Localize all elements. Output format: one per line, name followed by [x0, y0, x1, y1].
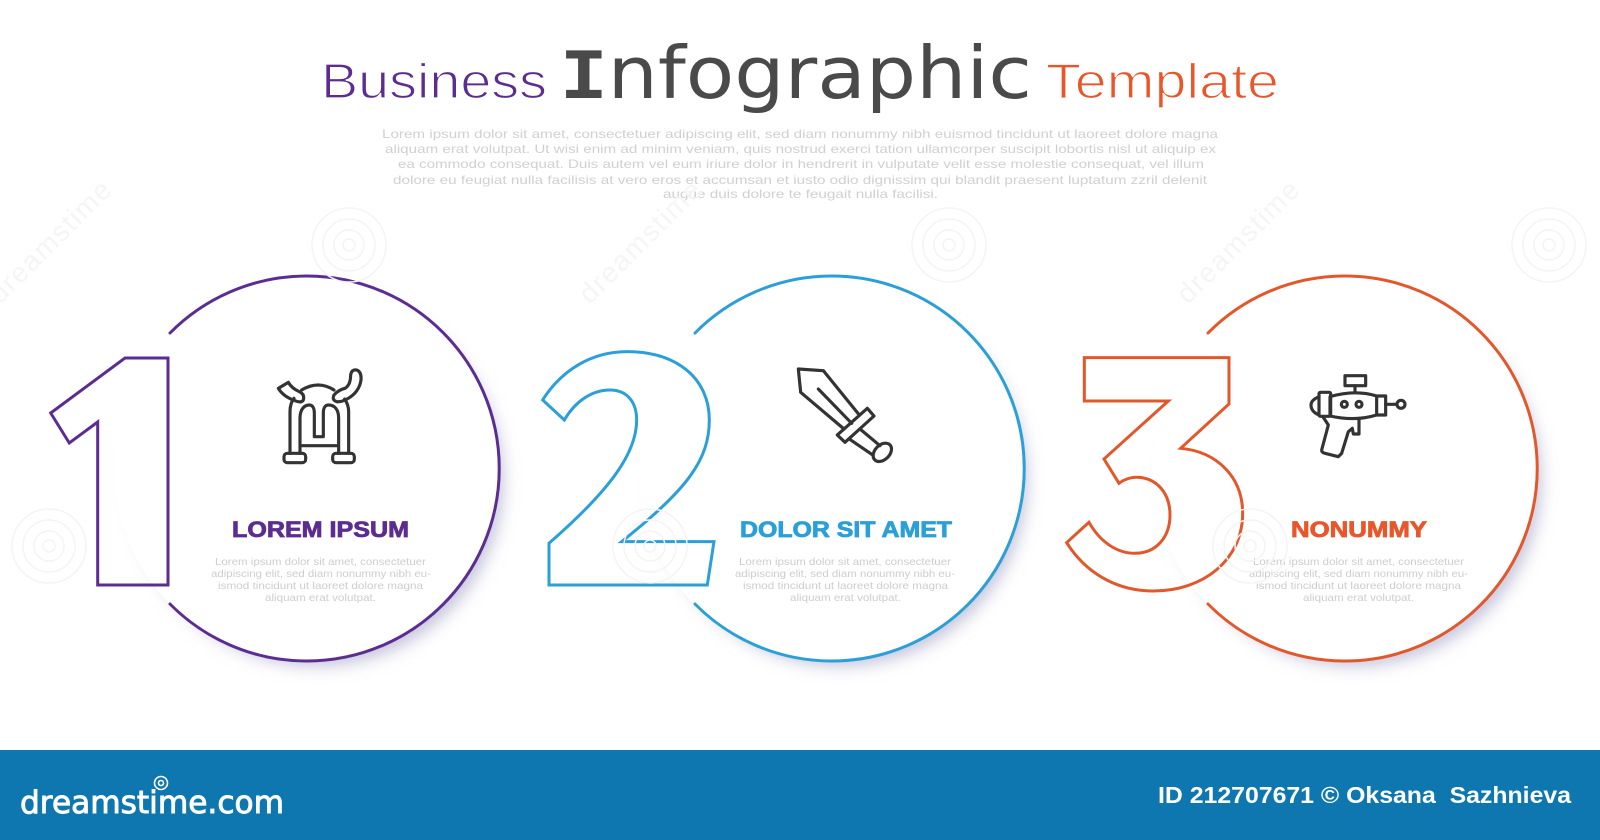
title word: Template: Template: [1046, 55, 1279, 109]
text 1: Lorem ipsum dolor sit amet, consectetuer: [215, 556, 427, 568]
text 2: adipiscing elit, sed diam nonummy nibh eu-: [735, 568, 956, 580]
panel: step 2: [543, 276, 1027, 666]
footer band: [0, 750, 1600, 840]
intro paragraph: aliquam erat volutpat. Ut wisi enim ad minim veniam, quis nostrud exerci tation ullamcorper suscipit lobortis nisl ut aliquip ex: [385, 142, 1216, 156]
number 3: [1067, 358, 1243, 591]
text 2: [735, 556, 956, 604]
icon: logo spiral: [154, 776, 168, 790]
text 2: aliquam erat volutpat.: [790, 592, 901, 604]
circle fill 2: [638, 276, 1023, 661]
icon: ray gun: [1311, 376, 1405, 457]
icon: sword: [798, 369, 895, 465]
text 3: adipiscing elit, sed diam nonummy nibh eu-: [1249, 568, 1469, 580]
intro paragraph: Lorem ipsum dolor sit amet, consectetuer adipiscing elit, sed diam nonummy nibh euismod tincidunt ut laoreet dolore magna: [382, 127, 1218, 141]
circle outline 1: [170, 276, 499, 661]
text 1: ismod tincidunt ut laoreet dolore magna: [218, 580, 423, 592]
watermark marks: dreamstime: [1170, 174, 1305, 309]
title word: Infographic: Infographic: [560, 31, 1032, 120]
circle fill 3: [1152, 276, 1537, 661]
text 3: Lorem ipsum dolor sit amet, consectetuer: [1253, 556, 1465, 568]
circle outline 2: [695, 276, 1024, 661]
panel: step 3: [1067, 276, 1541, 666]
text 3: [1249, 556, 1469, 604]
circle outline 3: [1208, 276, 1537, 661]
text 1: [211, 556, 432, 604]
watermark marks: dreamstime: [572, 174, 707, 309]
number 2: [543, 352, 714, 585]
text 2: ismod tincidunt ut laoreet dolore magna: [743, 580, 948, 592]
heading 3: NONUMMY: [1291, 517, 1427, 542]
watermark marks: [0, 174, 1586, 583]
intro paragraph: augue duis dolore te feugait nulla facilisi.: [663, 187, 938, 201]
circle shadow 3: [1169, 294, 1541, 666]
heading 1: LOREM IPSUM: [232, 517, 409, 542]
number 1: [51, 358, 168, 585]
text 1: aliquam erat volutpat.: [265, 592, 376, 604]
text 3: aliquam erat volutpat.: [1303, 592, 1414, 604]
intro paragraph: dolore eu feugiat nulla facilisis at vero eros et accumsan et iusto odio dignissim qui blandit praesent luptatum zzril delenit: [393, 173, 1208, 187]
text 2: Lorem ipsum dolor sit amet, consectetuer: [739, 556, 952, 568]
footer logo: dreamstime.com: [20, 785, 284, 821]
circle fill 1: [114, 276, 499, 661]
panel: step 1: [51, 276, 503, 666]
text 3: ismod tincidunt ut laoreet dolore magna: [1256, 580, 1461, 592]
intro paragraph: [382, 127, 1218, 201]
circle shadow 2: [655, 294, 1027, 666]
footer credit: ID 212707671 © Oksana Sazhnieva: [1158, 782, 1571, 808]
title: [321, 31, 1279, 120]
intro paragraph: ea commodo consequat. Duis autem vel eum iriure dolor in hendrerit in vulputate velit esse molestie consequat, vel illum: [398, 157, 1204, 171]
text 1: adipiscing elit, sed diam nonummy nibh eu-: [211, 568, 432, 580]
icon: viking helmet: [278, 370, 361, 463]
heading 2: DOLOR SIT AMET: [740, 517, 953, 542]
title word: Business: Business: [321, 55, 547, 109]
circle shadow 1: [131, 294, 503, 666]
